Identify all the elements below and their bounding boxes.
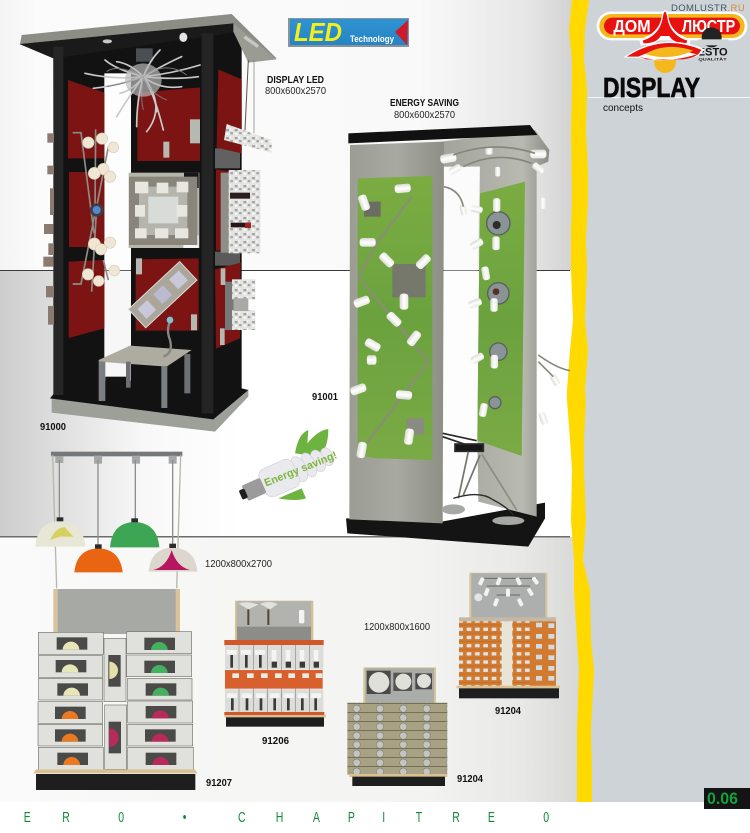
side crystal lamps: [221, 170, 260, 330]
display 91204 left: [347, 667, 447, 786]
logo: Dom Lustr: ДОМ: [613, 16, 651, 36]
label: ENERGY SAVING: [390, 98, 459, 121]
arch fittings: [444, 147, 570, 377]
left gray panel: [349, 142, 444, 523]
roof: [348, 125, 537, 143]
site name: DOMLUSTR.RU: [671, 3, 745, 14]
zigzag track: [358, 197, 428, 443]
label: 91207: 91207: [206, 777, 232, 789]
logo: Dom Lustr: QUALITÄT: [698, 57, 728, 61]
white box rows: [225, 645, 323, 712]
subheading: concepts: concepts: [603, 103, 643, 114]
white rule under heading: [588, 97, 750, 98]
table: [99, 317, 192, 408]
base: [346, 503, 545, 547]
energy saving bulb: [235, 429, 339, 509]
gap: [443, 167, 479, 495]
box windows: [55, 637, 176, 765]
orange box row: [225, 670, 323, 689]
boxes: [38, 632, 193, 770]
wall plates: [364, 202, 510, 434]
panel: grey right column: [584, 0, 750, 802]
plinth: [349, 774, 447, 786]
back panel: [469, 573, 547, 619]
central gap: [104, 73, 131, 383]
back panel: [53, 589, 180, 634]
back panel: [363, 667, 436, 703]
label: 1200x800x2700: 1200x800x2700: [205, 558, 272, 570]
green panels: [358, 176, 432, 460]
heading: DISPLAY: DISPLAY: [603, 72, 700, 103]
switches on panels: [136, 119, 225, 345]
pillars: [53, 47, 63, 395]
display tower 91000: [19, 14, 277, 432]
badge: LED Technology: Technology: [350, 34, 394, 44]
page number box: 0.06: [707, 789, 738, 808]
display 91204 right: [457, 573, 560, 698]
footer text: ER0•CHAPITRE0: [24, 808, 549, 825]
label: 91206: 91206: [262, 735, 289, 747]
logo: Dom Lustr: ЛЮСТР: [682, 16, 735, 36]
label: 91204 right: 91204: [495, 705, 521, 717]
tower body: [50, 27, 248, 419]
left side lamps: [43, 133, 54, 325]
orange top strip: [224, 640, 324, 645]
dome thumbnails: [62, 642, 169, 765]
center mirror lamp: [129, 173, 199, 248]
label: DISPLAY LED: 800x600x2570: [265, 85, 326, 97]
badge: LED Technology: LED: [294, 17, 342, 47]
display tower 91001: [235, 125, 570, 547]
footer band: [0, 802, 750, 833]
pendant shades: [35, 517, 197, 572]
badge: LED Technology: [288, 17, 409, 47]
stock boxes: [459, 617, 556, 686]
label: 91000: 91000: [40, 421, 66, 433]
wall lamp with globes: [73, 129, 120, 292]
page number box: [704, 788, 750, 809]
tower base: [52, 389, 248, 432]
plinth: [224, 712, 326, 727]
linear hanging lamp: [224, 36, 272, 153]
label: 1200x800x1600: 1200x800x1600: [364, 621, 430, 633]
label: 91204 left: 91204: [457, 773, 483, 785]
background: page sections: [0, 0, 600, 802]
label: 91001: 91001: [312, 391, 338, 403]
chandelier: [85, 48, 200, 132]
label: ENERGY SAVING: ENERGY SAVING: [390, 98, 459, 109]
label: DISPLAY LED: [265, 75, 326, 97]
logo: Dom Lustr: ESTO: [698, 46, 728, 58]
label: DISPLAY LED: DISPLAY LED: [267, 75, 324, 86]
label: ENERGY SAVING: 800x600x2570: [394, 109, 455, 121]
right gray panel: [442, 130, 549, 517]
red panels: [68, 69, 242, 349]
display 91206: [224, 601, 326, 727]
stock boxes: [347, 703, 447, 775]
floor lamp cables: [442, 433, 524, 525]
energy saving bulb: Energy saving!: [263, 449, 339, 489]
plinth: [33, 769, 198, 790]
plinth: [457, 686, 560, 698]
back panel: [235, 601, 313, 641]
pendant bar and cords: [51, 452, 182, 588]
display 91207: [33, 452, 198, 790]
tower roof: [19, 14, 277, 63]
diagonal lamp: [128, 262, 197, 328]
logo: Dom Lustr: [597, 10, 747, 73]
lights: [349, 147, 561, 459]
yellow torn strip: [567, 0, 594, 802]
